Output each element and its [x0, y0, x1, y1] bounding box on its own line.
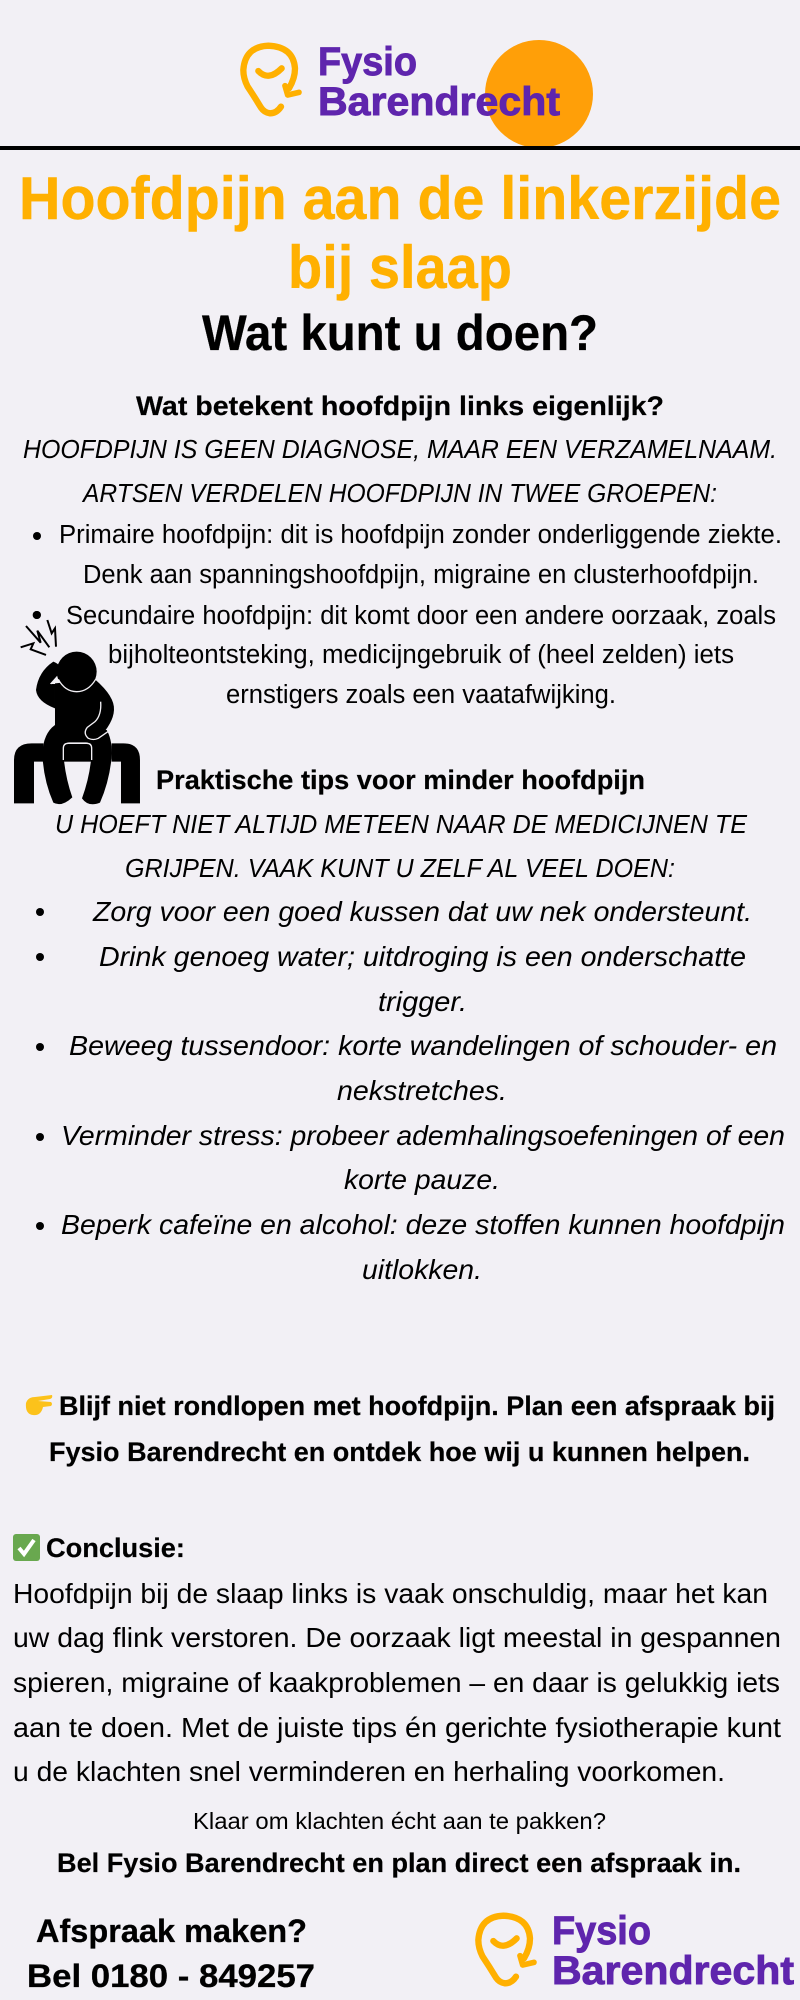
contact phone: Afspraak maken?: [36, 1913, 307, 1949]
conclusion: spieren, migraine of kaakproblemen – en daar is gelukkig iets: [13, 1667, 780, 1698]
section: practical tips: uitlokken.: [362, 1254, 482, 1285]
closing call: Bel Fysio Barendrecht en plan direct een afspraak in.: [57, 1848, 741, 1878]
section: meaning of headache: ernstigers zoals een vaatafwijking.: [226, 681, 616, 709]
icon: pointing hand: [26, 1395, 52, 1415]
section: practical tips: Beweeg tussendoor: korte wandelingen of schouder- en: [69, 1030, 777, 1061]
conclusion: Hoofdpijn bij de slaap links is vaak onschuldig, maar het kan: [13, 1578, 768, 1609]
title: [19, 165, 781, 301]
call to action: [26, 1391, 775, 1467]
title: Hoofdpijn aan de linkerzijde: [19, 165, 781, 232]
section: meaning of headache: Secundaire hoofdpijn: dit komt door een andere oorzaak, zoals: [66, 602, 776, 630]
header logo: Barendrecht: [318, 80, 560, 124]
icon: ear logo: [243, 46, 299, 113]
call to action: Fysio Barendrecht en ontdek hoe wij u kunnen helpen.: [49, 1437, 750, 1467]
icon: check mark: [13, 1534, 40, 1561]
section: practical tips: trigger.: [378, 986, 467, 1017]
section: practical tips: nekstretches.: [337, 1075, 507, 1106]
section: meaning of headache: Primaire hoofdpijn: dit is hoofdpijn zonder onderliggende ziekte.: [59, 521, 782, 549]
section: meaning of headache: ARTSEN VERDELEN HOOFDPIJN IN TWEE GROEPEN:: [81, 480, 717, 508]
icon: ear logo: [478, 1916, 534, 1983]
section: meaning of headache: HOOFDPIJN IS GEEN DIAGNOSE, MAAR EEN VERZAMELNAAM.: [23, 436, 777, 464]
section: meaning of headache: Wat betekent hoofdpijn links eigenlijk?: [136, 391, 664, 421]
title: bij slaap: [288, 234, 512, 301]
contact phone: Bel 0180 - 849257: [27, 1958, 315, 1994]
footer logo: [478, 1909, 794, 1993]
conclusion: uw dag flink verstoren. De oorzaak ligt meestal in gespannen: [13, 1622, 781, 1653]
logo text: Fysio: [318, 40, 417, 84]
logo text: Fysio: [552, 1909, 651, 1953]
conclusion: Conclusie:: [46, 1533, 185, 1563]
footer logo: Barendrecht: [552, 1949, 794, 1993]
conclusion: aan te doen. Met de juiste tips én gerichte fysiotherapie kunt: [13, 1712, 781, 1743]
section: practical tips: Drink genoeg water; uitdroging is een onderschatte: [99, 941, 746, 972]
conclusion: u de klachten snel verminderen en herhaling voorkomen.: [13, 1756, 725, 1787]
section: meaning of headache: Denk aan spanningshoofdpijn, migraine en clusterhoofdpijn.: [83, 561, 759, 589]
conclusion: [13, 1533, 781, 1787]
icon: person with headache on bench: [14, 611, 140, 804]
section: practical tips: [36, 765, 785, 1285]
contact phone: [27, 1913, 315, 1994]
section: practical tips: U HOEFT NIET ALTIJD METEEN NAAR DE MEDICIJNEN TE: [55, 811, 748, 839]
closing call: [57, 1808, 741, 1878]
call to action: Blijf niet rondlopen met hoofdpijn. Plan een afspraak bij: [59, 1391, 775, 1421]
section: meaning of headache: [23, 391, 782, 709]
section: meaning of headache: bijholteontsteking, medicijngebruik of (heel zelden) iets: [108, 641, 734, 669]
subtitle: Wat kunt u doen?: [202, 305, 598, 361]
closing call: Klaar om klachten écht aan te pakken?: [193, 1808, 606, 1834]
header logo: [243, 40, 593, 148]
header divider line: [0, 146, 800, 150]
section: practical tips: Praktische tips voor minder hoofdpijn: [156, 765, 645, 795]
decorative orange circle: [485, 40, 593, 148]
section: practical tips: Verminder stress: probeer ademhalingsoefeningen of een: [61, 1120, 785, 1151]
section: practical tips: korte pauze.: [344, 1164, 500, 1195]
section: practical tips: Beperk cafeïne en alcohol: deze stoffen kunnen hoofdpijn: [61, 1209, 785, 1240]
section: practical tips: Zorg voor een goed kussen dat uw nek ondersteunt.: [92, 896, 752, 927]
section: practical tips: GRIJPEN. VAAK KUNT U ZELF AL VEEL DOEN:: [125, 855, 675, 883]
